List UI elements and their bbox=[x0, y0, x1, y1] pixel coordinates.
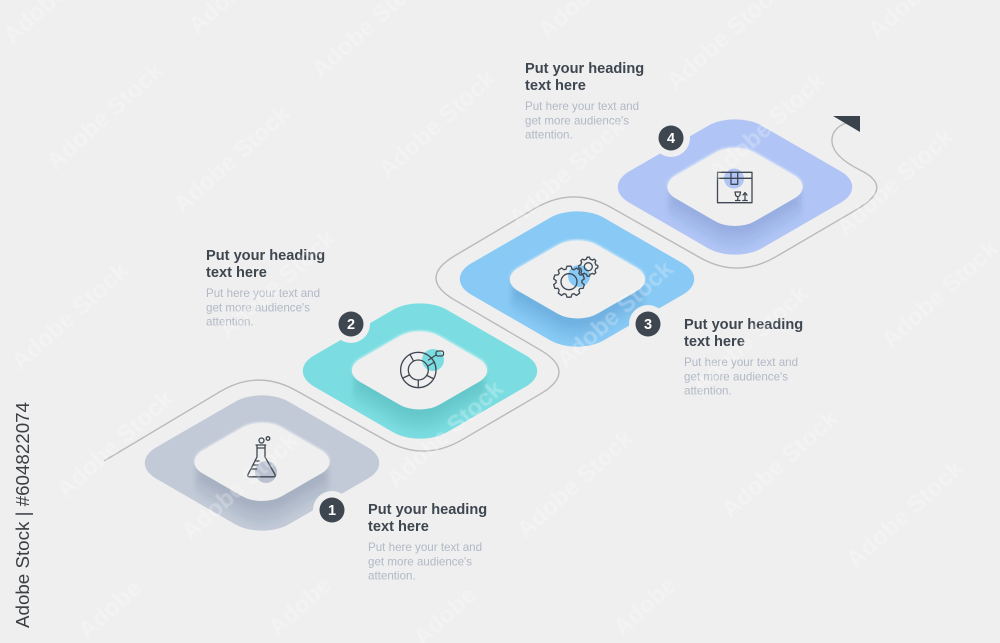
watermark pattern: Adobe Stock bbox=[686, 280, 814, 399]
watermark pattern: Adobe Stock bbox=[831, 123, 959, 242]
notch: step 4 bbox=[652, 119, 690, 157]
watermark pattern: Adobe Stock bbox=[703, 67, 831, 186]
body: step 4: attention. bbox=[525, 129, 573, 142]
badge: step 4 bbox=[658, 126, 684, 150]
highlight: step 1 bbox=[183, 415, 341, 506]
badge: step 2: 2 bbox=[347, 317, 355, 333]
body: step 3: attention. bbox=[684, 385, 732, 398]
watermark pattern: Adobe Stock bbox=[551, 255, 679, 374]
body: step 2: Put here your text and bbox=[206, 287, 320, 300]
connector path bbox=[104, 122, 877, 461]
watermark pattern: Adobe Stock bbox=[503, 113, 631, 232]
watermark pattern: Adobe Stock bbox=[168, 100, 296, 219]
highlight: step 4 bbox=[656, 140, 814, 231]
body: step 3: get more audience's bbox=[684, 370, 788, 383]
arrow head bbox=[833, 116, 860, 132]
highlight: step 2 bbox=[340, 323, 499, 415]
tile: step 4 base bbox=[602, 110, 868, 264]
tile: step 2 top bbox=[340, 325, 499, 416]
watermark pattern: Adobe bbox=[263, 571, 337, 641]
body: step 1: attention. bbox=[368, 570, 416, 583]
watermark pattern: Adobe Stock bbox=[373, 65, 501, 184]
icon: gears bbox=[553, 257, 598, 297]
watermark pattern: Adobe bbox=[608, 571, 682, 641]
body: step 2: attention. bbox=[206, 316, 254, 329]
icon: flask bbox=[248, 437, 277, 483]
stock id side label: Adobe Stock | #604822074 bbox=[13, 402, 33, 628]
highlight: step 3 bbox=[498, 232, 657, 324]
watermark pattern: Adobe Stock bbox=[6, 257, 134, 376]
panel: step 1 bbox=[129, 386, 395, 540]
heading: step 2: text here bbox=[206, 265, 267, 281]
body: step 1: Put here your text and bbox=[368, 541, 482, 554]
watermark pattern: Adobe Stock bbox=[876, 235, 1000, 354]
badge: step 3 bbox=[636, 312, 660, 336]
notch: step 3 bbox=[629, 305, 667, 343]
watermark pattern: Adobe Stock bbox=[176, 427, 304, 546]
panel: step 2 bbox=[287, 294, 553, 448]
icon: package box bbox=[718, 168, 752, 203]
text block: step 1 bbox=[368, 502, 487, 583]
watermark pattern: Adobe Stock bbox=[841, 455, 969, 574]
body: step 3: Put here your text and bbox=[684, 356, 798, 369]
heading: step 1: text here bbox=[368, 519, 429, 535]
heading: step 2: Put your heading bbox=[206, 248, 325, 264]
heading: step 4: Put your heading bbox=[525, 61, 644, 77]
badge: step 4: 4 bbox=[667, 131, 675, 147]
watermark pattern: Adobe Stock bbox=[716, 405, 844, 524]
notch: step 2 bbox=[332, 305, 370, 343]
watermark pattern: Adobe Stock bbox=[41, 57, 169, 176]
tile: step 1 base bbox=[129, 386, 395, 540]
heading: step 3: Put your heading bbox=[684, 317, 803, 333]
heading: step 4: text here bbox=[525, 78, 586, 94]
heading: step 3: text here bbox=[684, 334, 745, 350]
heading: step 1: Put your heading bbox=[368, 502, 487, 518]
watermark pattern: Adobe Stock bbox=[213, 225, 341, 344]
text block: step 4 bbox=[525, 61, 644, 142]
badge: step 1 bbox=[320, 498, 344, 522]
watermark pattern: Adobe Stock bbox=[51, 385, 179, 504]
text block: step 3 bbox=[684, 317, 803, 398]
shadow: step 4 bbox=[656, 145, 814, 257]
shadow: step 1 bbox=[183, 421, 341, 533]
body: step 2: get more audience's bbox=[206, 301, 310, 314]
watermark pattern: Adobe Stock bbox=[511, 425, 639, 544]
badge: step 2 bbox=[338, 312, 364, 336]
body: step 4: Put here your text and bbox=[525, 100, 639, 113]
panel: step 4 bbox=[602, 110, 868, 264]
shadow: step 3 bbox=[498, 238, 657, 349]
tile: step 4 top bbox=[656, 141, 814, 233]
watermark pattern: Adobe Stock bbox=[381, 375, 509, 494]
watermark pattern: Adobe bbox=[73, 574, 147, 643]
badge: step 1: 1 bbox=[328, 503, 336, 519]
tile: step 3 top bbox=[498, 234, 657, 325]
body: step 1: get more audience's bbox=[368, 555, 472, 568]
tile: step 2 base bbox=[287, 294, 553, 448]
icon: lifebuoy with flag bbox=[401, 349, 444, 388]
tile: step 1 top bbox=[183, 416, 341, 508]
body: step 4: get more audience's bbox=[525, 114, 629, 127]
badge: step 3: 3 bbox=[644, 317, 652, 333]
notch: step 1 bbox=[313, 491, 351, 529]
tile: step 3 base bbox=[444, 202, 710, 356]
text block: step 2 bbox=[206, 248, 325, 329]
shadow: step 2 bbox=[340, 329, 499, 441]
panel: step 3 bbox=[444, 202, 710, 356]
